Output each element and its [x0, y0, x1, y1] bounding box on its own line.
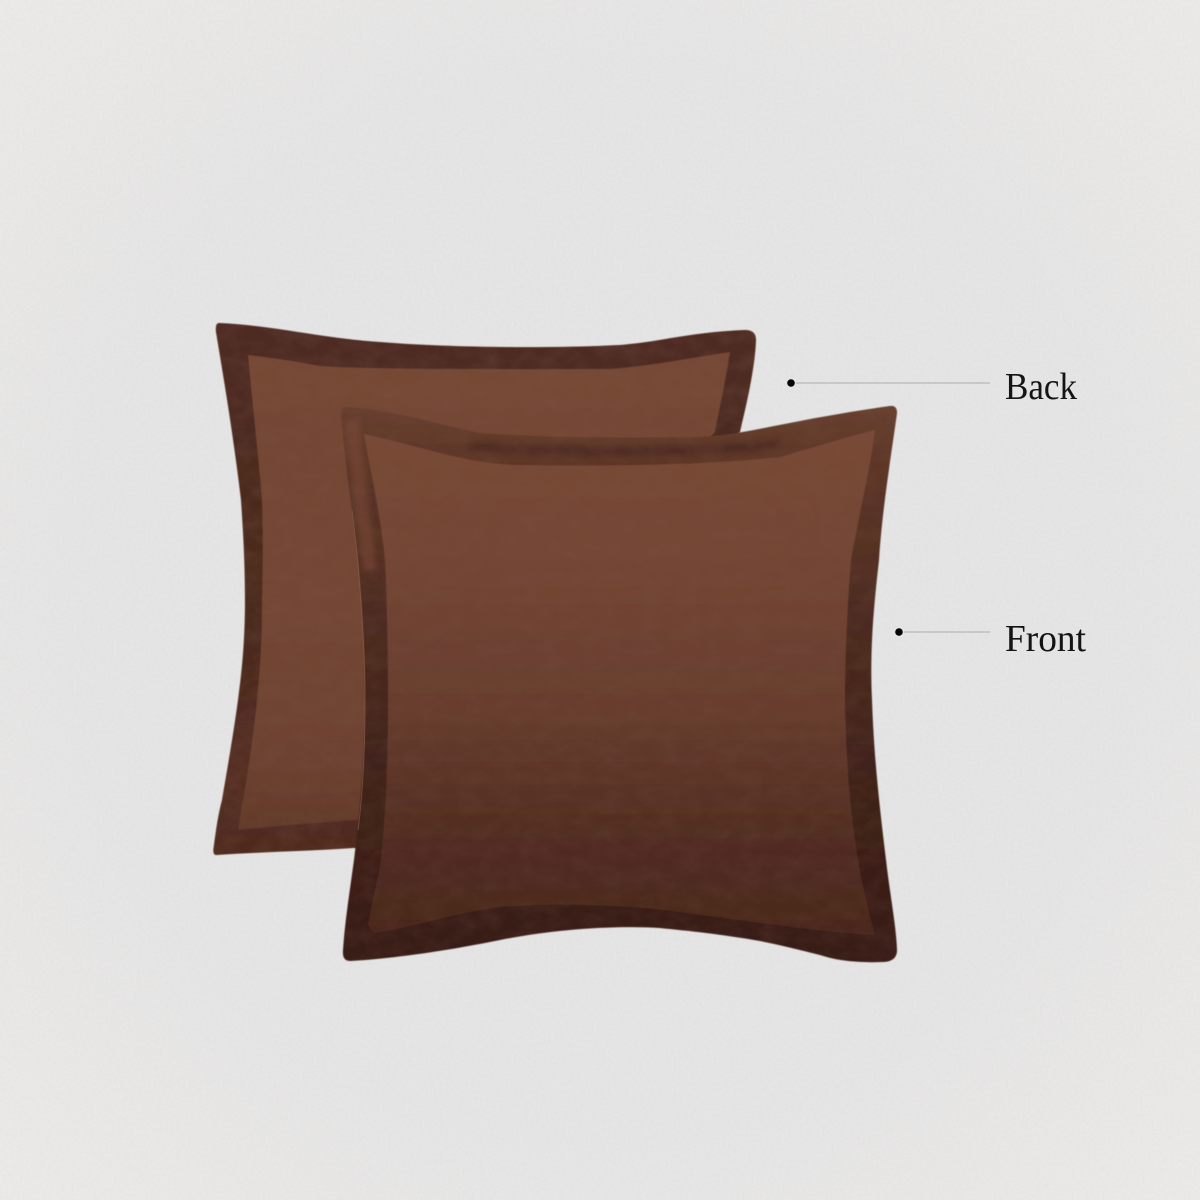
back pillow cushion: [238, 352, 730, 830]
label: back: Back: [1005, 366, 1077, 408]
dot: back: [787, 379, 795, 387]
back pillow flange: [213, 323, 756, 855]
back pillow flange texture: [210, 320, 760, 860]
leader line: back: [796, 382, 990, 384]
front pillow flange shading: [352, 420, 780, 570]
dot: front: [895, 628, 903, 636]
callout: front: [895, 618, 1086, 660]
front pillow flange texture: [346, 660, 890, 954]
label: front: Front: [1005, 618, 1086, 660]
front pillow flange highlight edge: [352, 510, 365, 830]
front pillow flange: [341, 406, 897, 962]
front pillow: [340, 404, 900, 964]
leader line: front: [904, 631, 990, 633]
back pillow nap texture: [230, 340, 740, 840]
back pillow: [210, 320, 760, 860]
front pillow nap texture: [360, 428, 880, 938]
callout: back: [787, 366, 1077, 408]
front pillow cushion: [364, 430, 875, 935]
